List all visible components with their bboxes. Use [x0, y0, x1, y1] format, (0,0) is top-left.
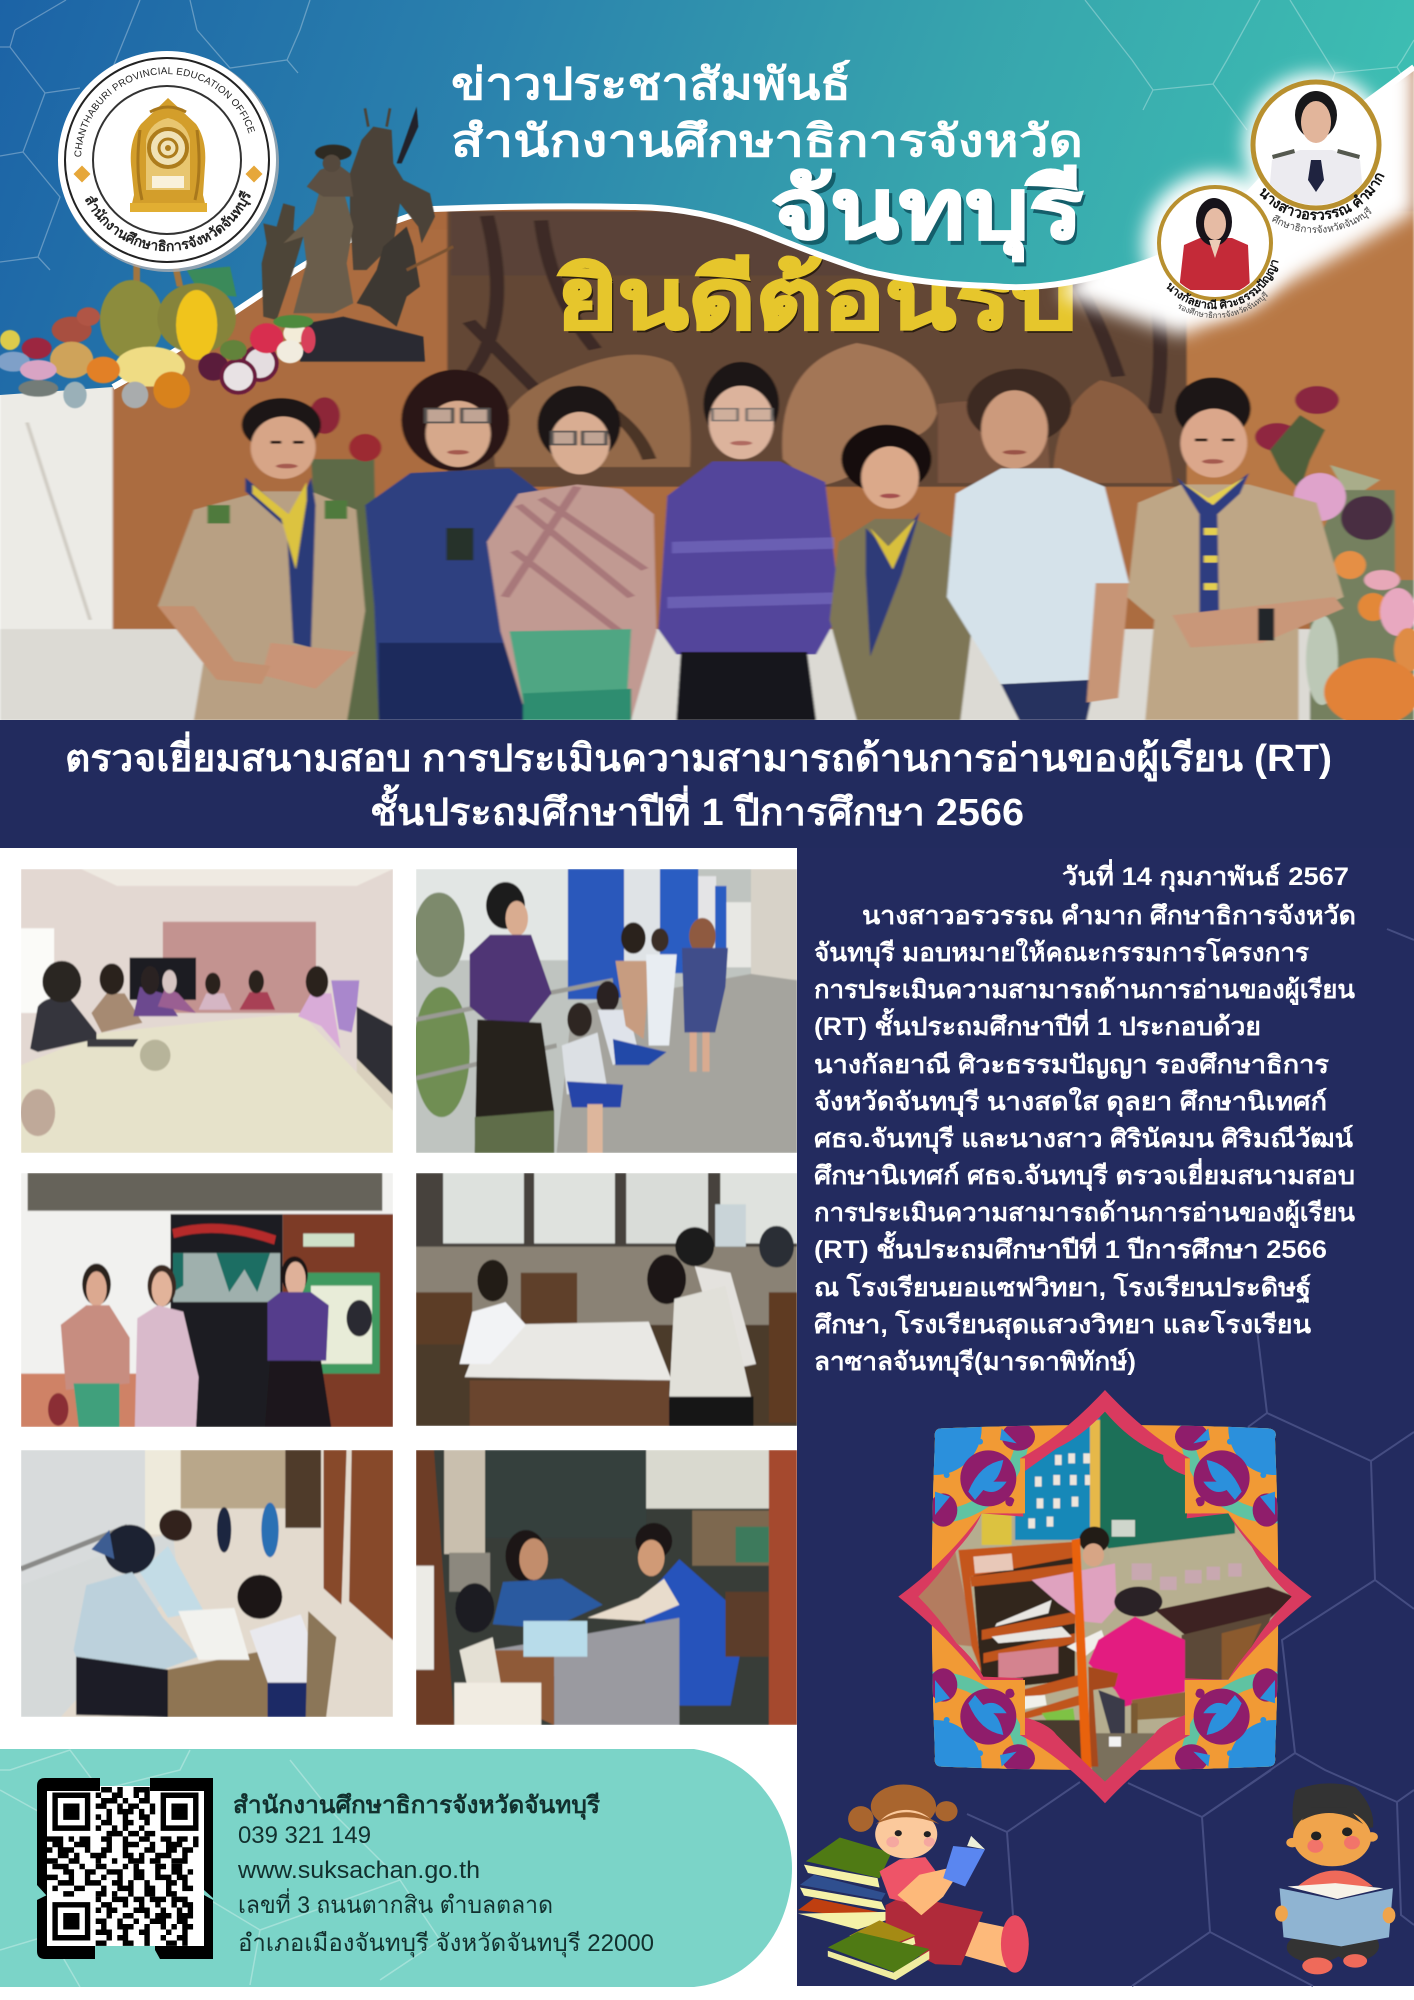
title band: ตรวจเยี่ยมสนามสอบ การประเมินความสามารถด้านการอ่านของผู้เรียน (RT) [65, 731, 1332, 782]
article body text [814, 902, 1356, 1378]
header title: สำนักงานศึกษาธิการจังหวัด [451, 117, 1083, 166]
photo: three women at door [21, 1173, 393, 1427]
banner group photo [0, 70, 1414, 720]
photo: student at desk with teachers [416, 1173, 797, 1426]
white swoosh glow [1060, 60, 1414, 335]
portrait: provincial education officer: นางสาวอรวรรณ คำมาก [1260, 173, 1385, 220]
article body text: การประเมินความสามารถด้านการอ่านของผู้เรียน [814, 976, 1355, 1006]
article body text: ศึกษานิเทศก์ ศธจ.จันทบุรี ตรวจเยี่ยมสนามสอบ [814, 1158, 1355, 1192]
logo seal: สำนักงานศึกษาธิการจังหวัดจันทบุรี [85, 190, 252, 252]
header wave band [0, 0, 1414, 395]
illustration: boy reading [1275, 1783, 1395, 1974]
article body text: (RT) ชั้นประถมศึกษาปีที่ 1 ประกอบด้วย [814, 1007, 1261, 1041]
portrait: provincial education officer: ศึกษาธิการจังหวัดจันทบุรี [1272, 206, 1372, 233]
article body text: ศธจ.จันทบุรี และนางสาว ศิรินัคมน ศิริมณีวัฒน์ [814, 1124, 1353, 1155]
fruit and gems cluster [0, 253, 316, 408]
article body text: ลาซาลจันทบุรี(มารดาพิทักษ์) [814, 1347, 1136, 1378]
welcome sign text: ยินดีต้อนรับ [560, 255, 1078, 349]
article body text: จันทบุรี มอบหมายให้คณะกรรมการโครงการ [814, 937, 1310, 969]
panel: contact footer [0, 1749, 792, 1987]
header hex pattern [0, 0, 1414, 270]
star border [898, 1390, 1312, 1803]
contact text [233, 1792, 654, 1958]
window photo [915, 1410, 1295, 1783]
article body text: นางสาวอรวรรณ คำมาก ศึกษาธิการจังหวัด [862, 902, 1356, 930]
statue on pedestal [262, 107, 453, 362]
article body text: การประเมินความสามารถด้านการอ่านของผู้เรียน [814, 1199, 1355, 1229]
article date: วันที่ 14 กุมภาพันธ์ 2567 [1062, 859, 1349, 893]
title band [0, 720, 1414, 848]
header title [451, 59, 1085, 266]
photo: teachers in corridor [21, 1450, 393, 1717]
mandala framed photo [898, 1390, 1312, 1804]
white glow behind portraits [1143, 73, 1388, 317]
photo: meeting room [21, 869, 393, 1153]
emblem [130, 98, 207, 212]
welcome sign text: ยินดีต้อนรับ [557, 252, 1077, 346]
green plant left [311, 459, 379, 720]
portrait: provincial education officer [1250, 80, 1385, 233]
header title: จันทบุรี [771, 162, 1083, 262]
flowers right [1255, 380, 1414, 726]
logo seal [58, 51, 279, 272]
contact text: เลขที่ 3 ถนนตากสิน ตำบลตลาด [238, 1888, 553, 1919]
article body text: (RT) ชั้นประถมศึกษาปีที่ 1 ปีการศึกษา 2566 [814, 1230, 1327, 1264]
article body text: ศึกษา, โรงเรียนสุดแสวงวิทยา และโรงเรียน [814, 1309, 1311, 1341]
header title: ข่าวประชาสัมพันธ์ [451, 59, 851, 109]
photo: corridor with student [416, 869, 797, 1153]
illustration: girl reading with books [798, 1785, 1029, 1980]
portrait: deputy education officer: รองศึกษาธิการจังหวัดจันทบุรี [1178, 291, 1268, 318]
article body text: จังหวัดจันทบุรี นางสดใส ดุลยา ศึกษานิเทศก์ [814, 1086, 1327, 1118]
logo seal: CHANTHABURI PROVINCIAL EDUCATION OFFICE [74, 67, 255, 157]
article body text: นางกัลยาณี ศิวะธรรมปัญญา รองศึกษาธิการ [814, 1051, 1330, 1079]
article body text: ณ โรงเรียนยอแซฟวิทยา, โรงเรียนประดิษฐ์ [814, 1272, 1311, 1304]
contact text: อำเภอเมืองจันทบุรี จังหวัดจันทบุรี 22000 [238, 1930, 654, 1958]
panel: article background [797, 848, 1414, 1986]
contact text: สำนักงานศึกษาธิการจังหวัดจันทบุรี [233, 1792, 600, 1821]
QR code [37, 1778, 213, 1959]
header title: จันทบุรี [775, 166, 1085, 266]
portrait: deputy education officer: นางกัลยาณี ศิวะธรรมปัญญา [1166, 260, 1279, 310]
orange pointed petals [1008, 1458, 1202, 1735]
portrait: deputy education officer [1157, 185, 1279, 318]
contact text: www.suksachan.go.th [237, 1857, 480, 1884]
people [158, 491, 365, 720]
mandala background [932, 1425, 1278, 1770]
title band: ชั้นประถมศึกษาปีที่ 1 ปีการศึกษา 2566 [370, 784, 1024, 834]
photo: students in classroom [416, 1450, 797, 1725]
contact text: 039 321 149 [238, 1822, 371, 1849]
